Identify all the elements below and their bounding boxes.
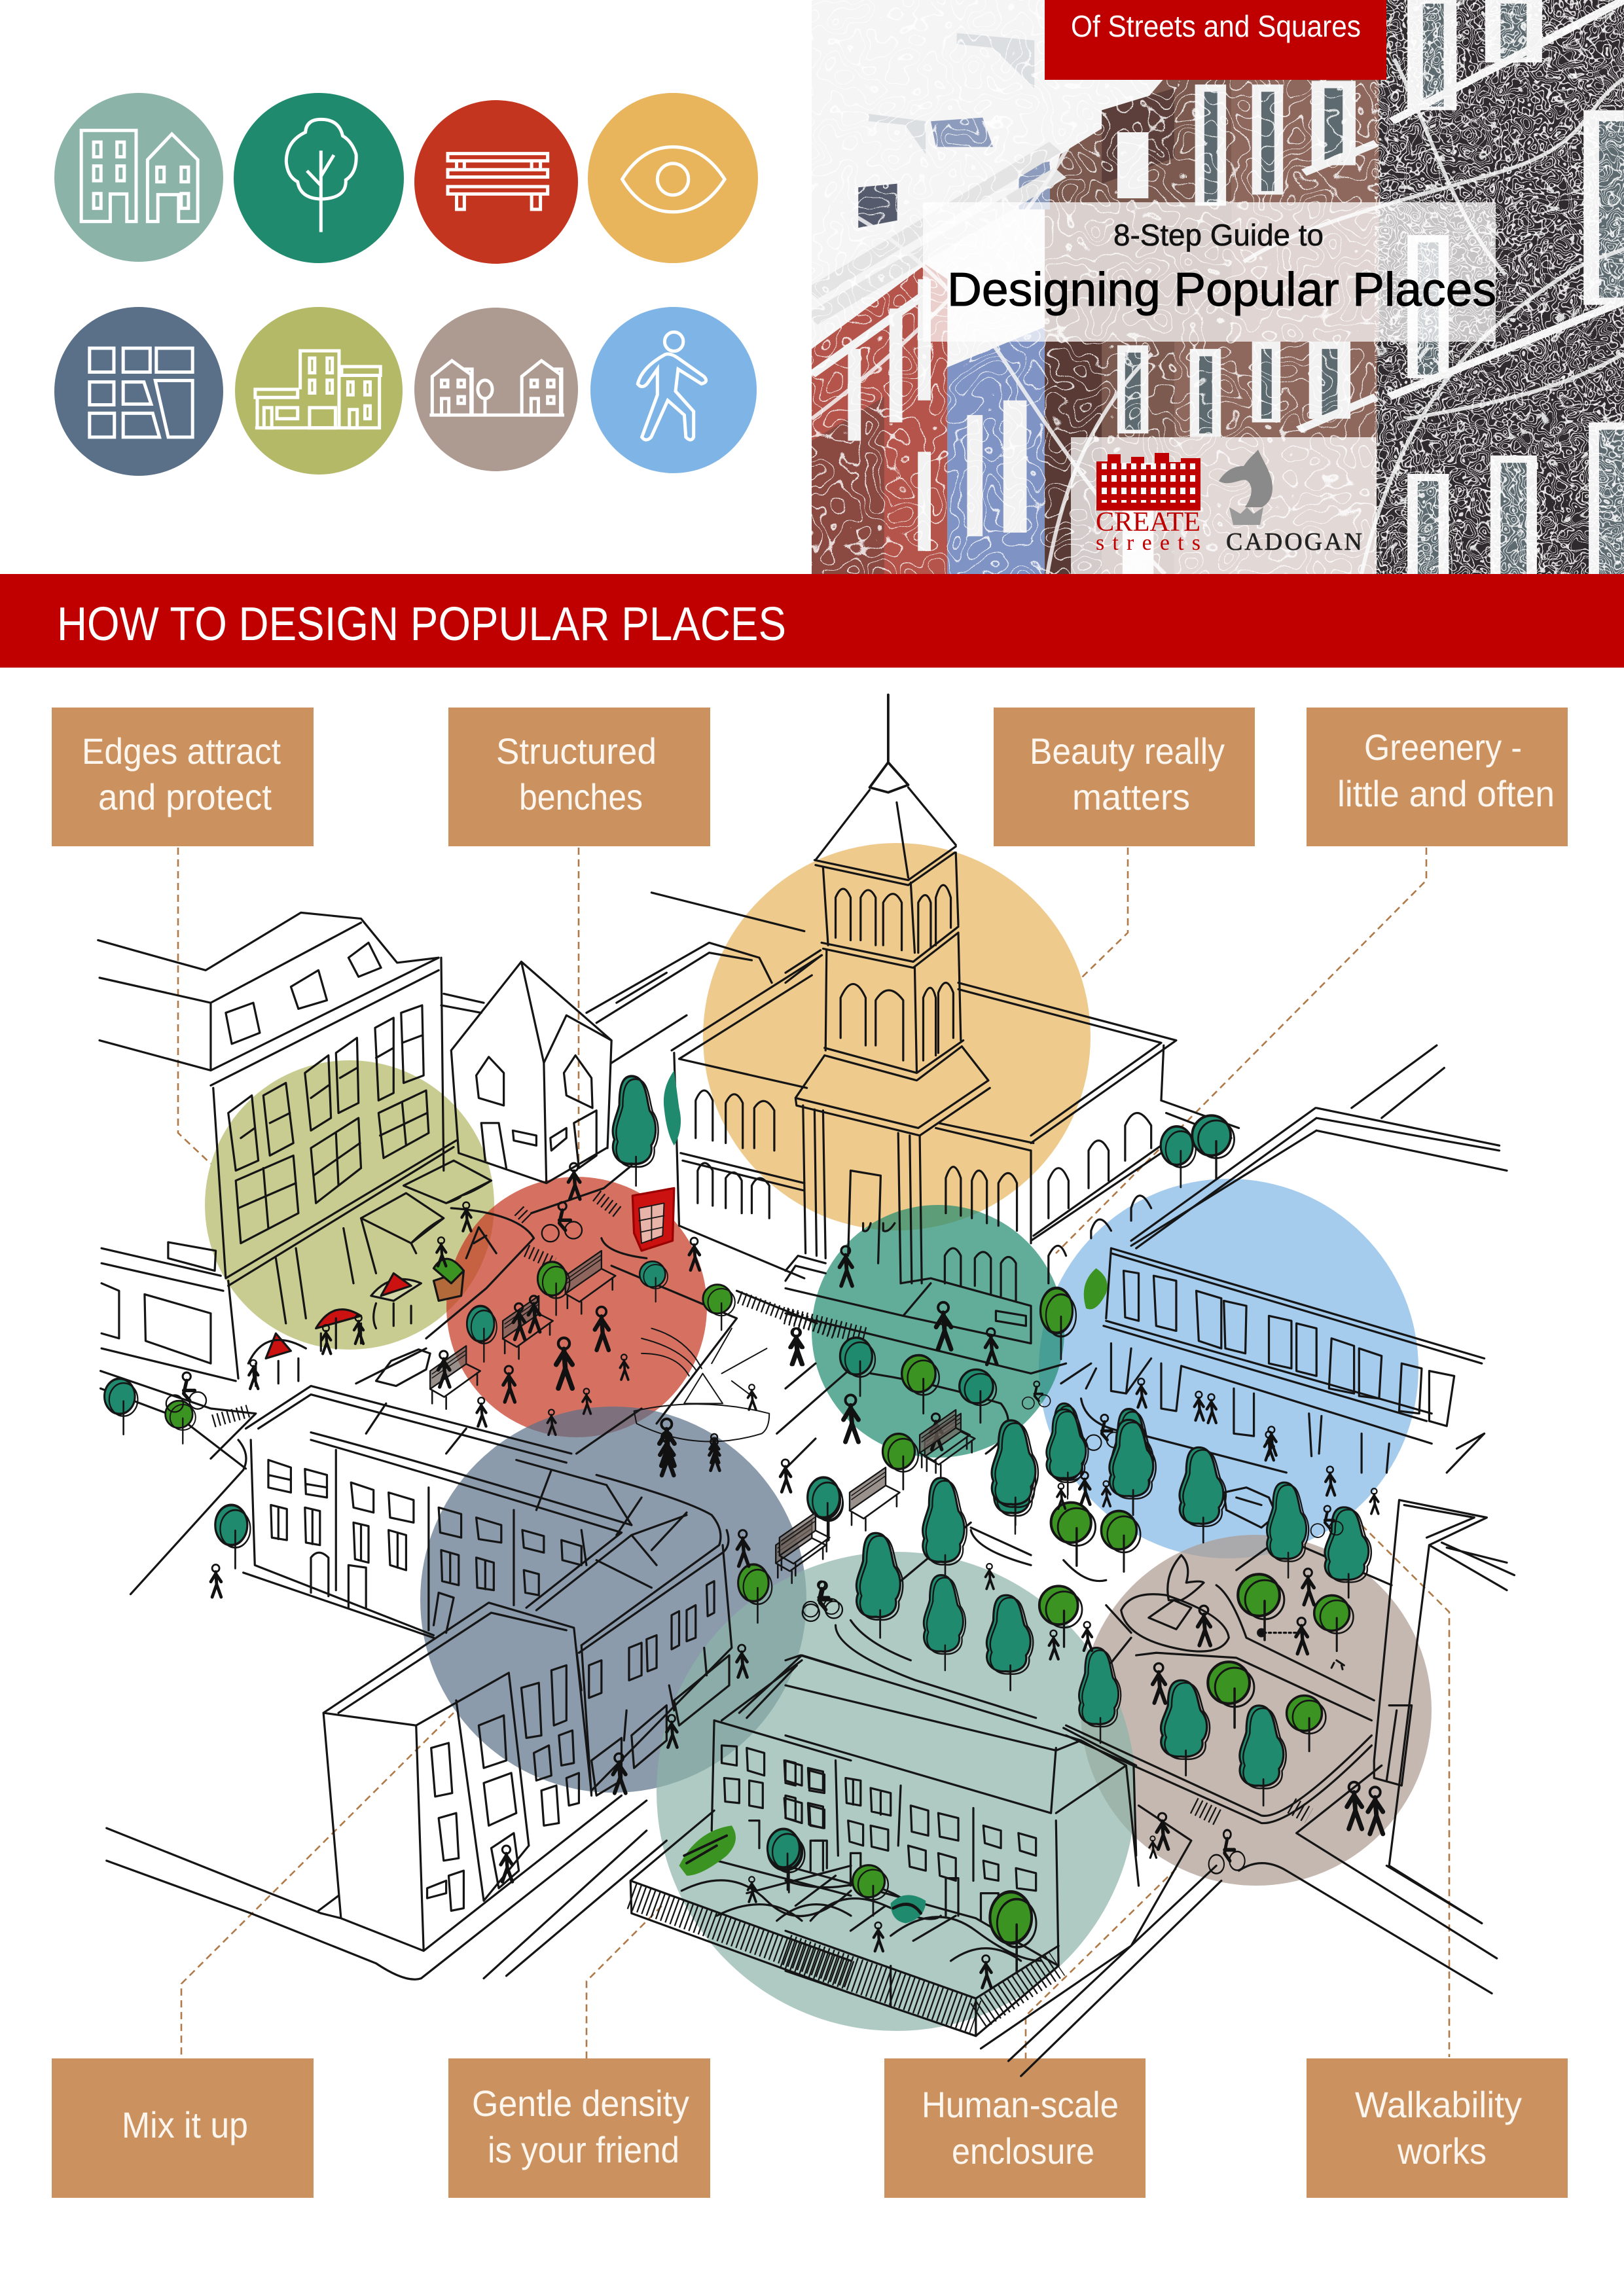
crossings (213, 1196, 837, 1421)
icon: gentle density buildings (54, 93, 223, 262)
callout: Gentle density is your friend: is your friend (488, 2129, 679, 2170)
callout: Human-scale enclosure (884, 2058, 1146, 2198)
callout: Edges attract and protect: and protect (98, 776, 272, 817)
benches (776, 1520, 826, 1583)
terrace building (244, 1433, 632, 1638)
street sketch: south-west quarter (107, 1419, 851, 1994)
callout: Mix it up: Mix it up (122, 2104, 248, 2145)
benches (780, 1410, 970, 1575)
parked car (376, 1350, 430, 1386)
main title: Designing Popular Places (947, 264, 1496, 316)
bench (925, 1414, 975, 1477)
major roads (812, 59, 1624, 574)
callout: Greenery little and often: little and often (1337, 773, 1555, 814)
people (803, 1431, 1383, 1988)
curved roof and facade (516, 1460, 732, 1795)
street sketch: north-west quarter (98, 893, 851, 1475)
logo: Create Streets: CREATE (1096, 507, 1200, 537)
gabled house (451, 961, 611, 1183)
icon: bench (414, 100, 578, 264)
callout: Greenery little and often: Greenery - (1364, 726, 1522, 768)
icon: walking person (590, 307, 757, 473)
east quarter paths (785, 1314, 1066, 1469)
callout: Greenery little and often (1307, 708, 1568, 846)
callout: Beauty really matters: matters (1072, 776, 1190, 817)
logo: Create Streets (1096, 453, 1200, 555)
callout: Human-scale enclosure: Human-scale (922, 2084, 1119, 2125)
trees (105, 1070, 735, 1444)
curved facade windows (589, 1581, 729, 1795)
callout: Gentle density is your friend (448, 2058, 710, 2198)
callout: Structured benches (448, 708, 710, 846)
icon: street grid (54, 307, 223, 476)
icon: mixed-use buildings (235, 307, 403, 475)
statue garden (1121, 1555, 1229, 1651)
trees and bushes (215, 1482, 843, 1892)
town hall tower (795, 694, 990, 1283)
icon: tree (234, 93, 404, 263)
callout: Beauty really matters: Beauty really (1030, 730, 1225, 772)
cover photo panel with street map overlay (812, 0, 1624, 576)
callout: Beauty really matters (994, 708, 1255, 846)
callout: Mix it up (52, 2058, 314, 2198)
mansard corner building (98, 912, 492, 1323)
rear roads (1131, 1045, 1507, 1248)
corner building (321, 1603, 621, 1951)
rear street and roofs (441, 893, 804, 1063)
heading band: HOW TO DESIGN POPULAR PLACES (57, 598, 786, 651)
subtitle: 8-Step Guide to (1113, 218, 1324, 252)
pale teal block front (630, 1655, 851, 1994)
callout: Walkability works (1307, 2058, 1568, 2198)
streets and plaza paths (101, 1166, 851, 1469)
street map line work (812, 0, 1624, 574)
pale teal block (785, 1655, 1139, 2036)
icon row: eight coloured principle icons (54, 93, 758, 476)
trees (840, 1115, 1235, 1534)
dashed leader lines (178, 848, 1449, 2058)
cafe umbrellas and tables (248, 1273, 421, 1386)
people (790, 1246, 1276, 1456)
callout: Structured benches: benches (519, 776, 643, 817)
logo: Cadogan: CADOGAN (1226, 528, 1362, 556)
title panel (923, 202, 1496, 342)
hatch steps (785, 1316, 865, 1336)
people (211, 1419, 842, 1902)
logo: Cadogan (1219, 450, 1362, 556)
crossings (1194, 1806, 1309, 1818)
callout: Structured benches: Structured (496, 730, 657, 772)
planter and A-board (433, 1271, 463, 1300)
callout: Walkability works: works (1397, 2130, 1487, 2172)
benches (430, 1251, 615, 1409)
tab: Of Streets and Squares (1045, 0, 1386, 80)
fountain (634, 1329, 769, 1442)
parked car and dotted ball (1224, 1488, 1276, 1528)
east building (1374, 1500, 1515, 1924)
icon: walkable houses (414, 308, 578, 471)
callout: Edges attract and protect (52, 708, 314, 846)
trees (767, 1409, 1371, 1973)
callout: Edges attract and protect: Edges attract (82, 730, 281, 772)
logo: Create Streets: streets (1096, 531, 1200, 555)
dense street map over dark building (1375, 0, 1624, 574)
street sketch: south-east quarter (767, 1409, 1515, 2076)
town hall east wing (785, 950, 1176, 1344)
lower left building (101, 1242, 571, 1463)
coloured principle circles over the sketch (205, 843, 1432, 2031)
tab: Of Streets and Squares: Of Streets and Squares (1071, 9, 1361, 43)
callout: Walkability works: Walkability (1355, 2084, 1522, 2125)
roads (107, 1440, 666, 1979)
red telephone box (632, 1188, 674, 1251)
logos panel (1071, 437, 1377, 574)
roads and garden paths (836, 1522, 1497, 2076)
town hall west wing (672, 955, 822, 1278)
blue building (1061, 1130, 1485, 1473)
people (166, 1163, 803, 1475)
street sketch: north-east quarter with town hall (785, 694, 1507, 1534)
icon: eye (588, 93, 758, 263)
callout: Human-scale enclosure: enclosure (952, 2130, 1094, 2172)
callout: Gentle density is your friend: Gentle density (472, 2083, 689, 2124)
building photo (812, 0, 1624, 576)
heading band (0, 574, 1624, 668)
